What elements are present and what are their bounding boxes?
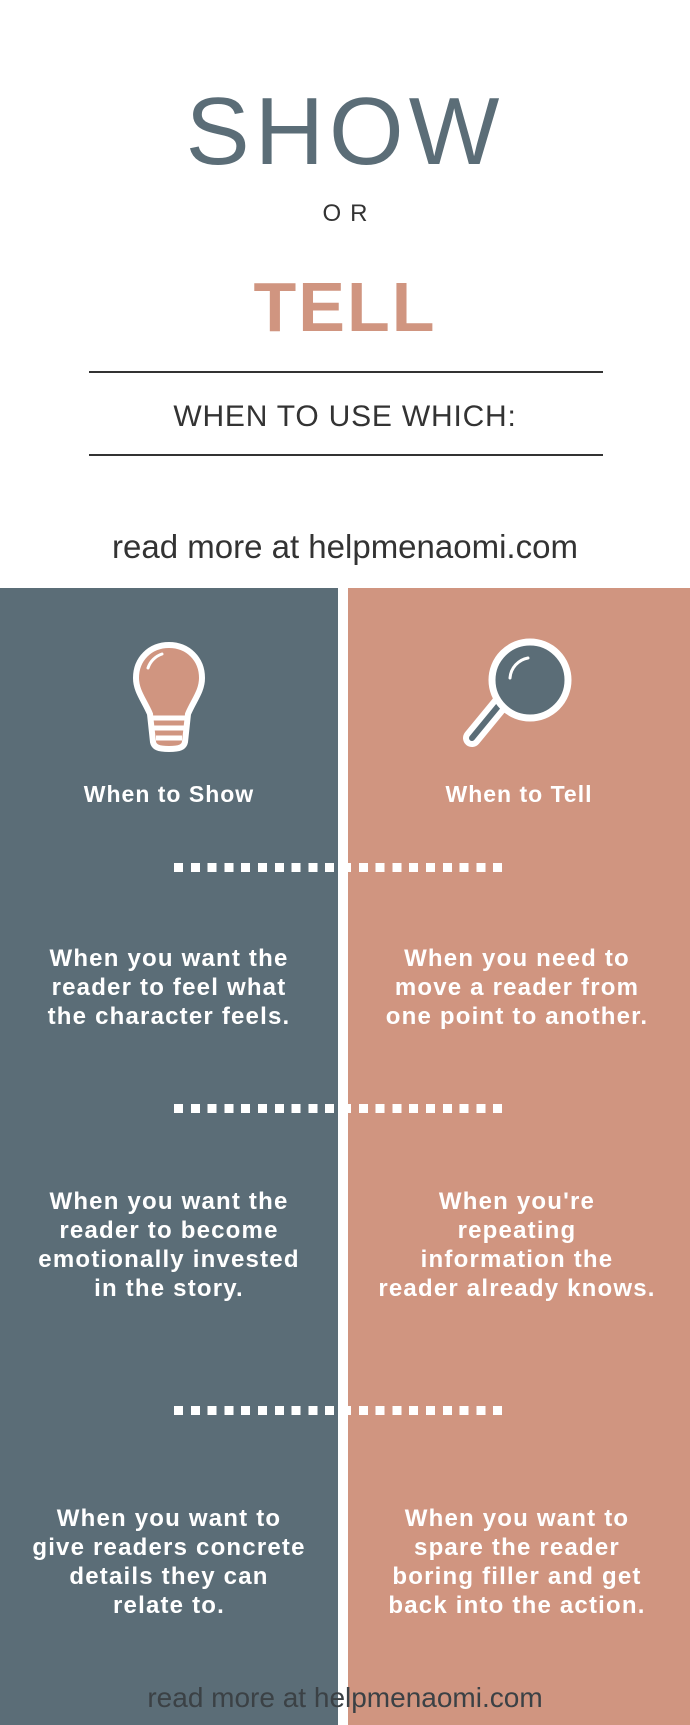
text: show row 2: emotionally invested	[38, 1246, 300, 1273]
text: show row 3: give readers concrete	[32, 1534, 306, 1561]
top link text: read more at helpmenaomi.com	[112, 528, 578, 565]
text: tell row 2	[378, 1188, 656, 1302]
text: show row 1: reader to feel what	[52, 974, 286, 1001]
text: show row 3	[32, 1505, 306, 1619]
title: TELL: TELL	[254, 268, 436, 346]
text: show row 2: reader to become	[59, 1217, 279, 1244]
text: tell row 1	[386, 945, 648, 1030]
text: tell row 3: spare the reader	[414, 1534, 620, 1561]
title: OR: OR	[322, 200, 376, 227]
text: show row 2: in the story.	[94, 1275, 244, 1302]
icon: magnifier	[463, 638, 572, 747]
text: tell row 1: When you need to	[404, 945, 630, 972]
text: tell row 2: reader already knows.	[378, 1275, 656, 1302]
heading: when to show: When to Show	[84, 781, 254, 807]
text: show row 3: relate to.	[113, 1592, 225, 1619]
text: tell row 3: back into the action.	[388, 1592, 646, 1619]
text: show row 1	[48, 945, 290, 1030]
text: show row 2	[38, 1188, 300, 1302]
text: tell row 1: one point to another.	[386, 1003, 648, 1030]
text: tell row 3: boring filler and get	[392, 1563, 642, 1590]
panel: show	[0, 588, 338, 1725]
text: show row 1: When you want the	[49, 945, 289, 972]
heading: when to tell: When to Tell	[445, 781, 592, 807]
text: tell row 3: When you want to	[405, 1505, 629, 1532]
panel: tell	[348, 588, 690, 1725]
text: tell row 2: When you're	[439, 1188, 595, 1215]
text: show row 2: When you want the	[49, 1188, 289, 1215]
text: show row 1: the character feels.	[48, 1003, 290, 1030]
subtitle: WHEN TO USE WHICH:	[173, 400, 517, 433]
text: tell row 3	[388, 1505, 646, 1619]
footer link text: read more at helpmenaomi.com	[147, 1682, 543, 1713]
text: show row 3: When you want to	[57, 1505, 281, 1532]
title: SHOW: SHOW	[186, 78, 504, 185]
text: tell row 2: repeating	[458, 1217, 576, 1244]
text: tell row 1: move a reader from	[395, 974, 639, 1001]
text: show row 3: details they can	[69, 1563, 269, 1590]
icon: light bulb	[133, 642, 205, 752]
text: tell row 2: information the	[421, 1246, 613, 1273]
